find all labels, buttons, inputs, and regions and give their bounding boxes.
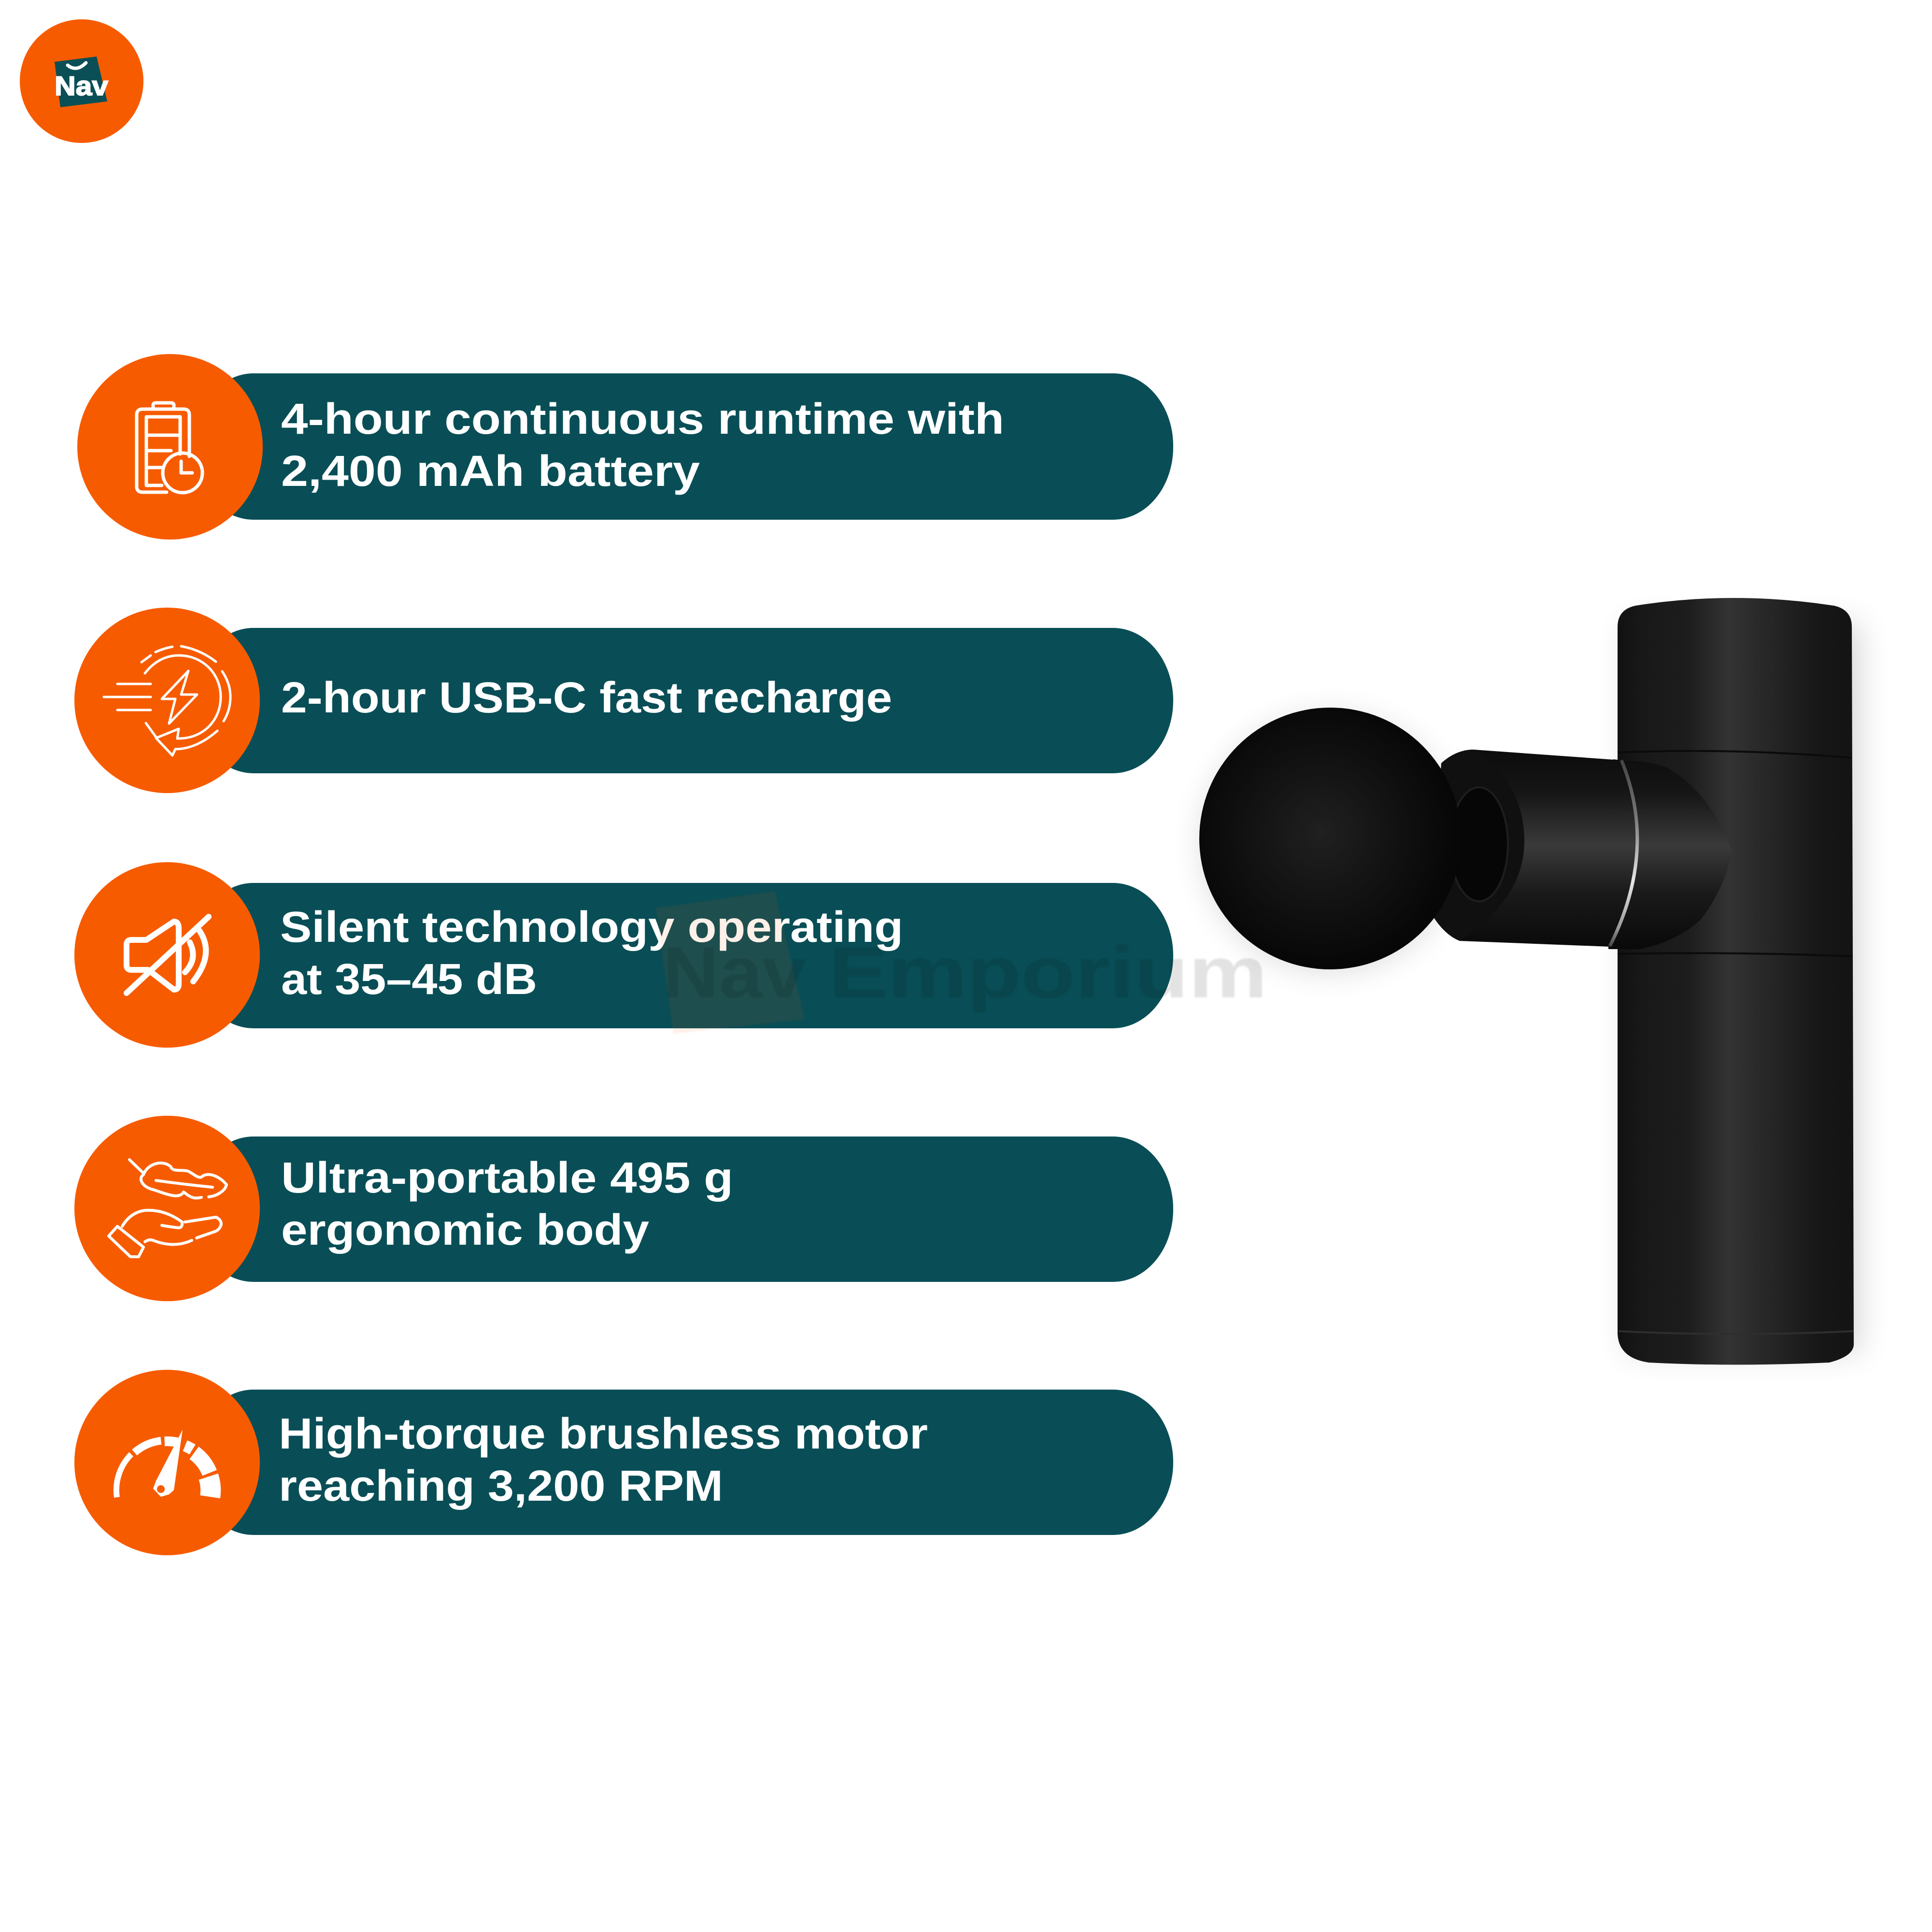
feature row: brushless motor [74,1370,1173,1555]
feature row: fast recharge: 2-hour USB-C fast recharge [281,674,892,722]
watermark: Emporium [829,932,1267,1013]
feature row: battery runtime: 2,400 mAh battery [281,447,700,496]
icon: speedometer [116,1430,211,1497]
feature row: battery runtime: 4-hour continuous runtime with [281,395,1004,443]
gun handle body [1618,598,1854,1365]
feature row: portable body: Ultra-portable 495 g [281,1154,733,1202]
feature row: portable body: ergonomic body [281,1206,649,1254]
feature row: silent technology: at 35–45 dB [281,955,537,1004]
product: massage gun [1199,598,1860,1365]
icon: muted speaker [127,917,209,993]
gun head tube [1432,750,1637,947]
neck joint [1450,787,1508,901]
gun neck bullet [1608,759,1733,949]
feature row: battery runtime [77,354,1173,540]
logo badge [20,19,143,143]
massage ball [1199,708,1461,969]
feature row: brushless motor: High-torque brushless motor [279,1410,928,1458]
feature row: fast recharge [74,608,1173,793]
icon: battery with clock [137,403,202,493]
silver ring [1610,760,1637,946]
icon: lightning recharge [104,646,230,755]
feature row: brushless motor: reaching 3,200 RPM [279,1462,723,1510]
icon: feather over hand [109,1160,227,1257]
watermark: Nav [663,932,806,1013]
watermark [656,891,1267,1034]
flange [1432,750,1524,941]
feature row: silent technology: Silent technology operating [280,903,903,952]
feature row: portable body [74,1116,1173,1301]
feature row: silent technology [74,862,1173,1048]
logo badge: Nav [55,71,108,101]
